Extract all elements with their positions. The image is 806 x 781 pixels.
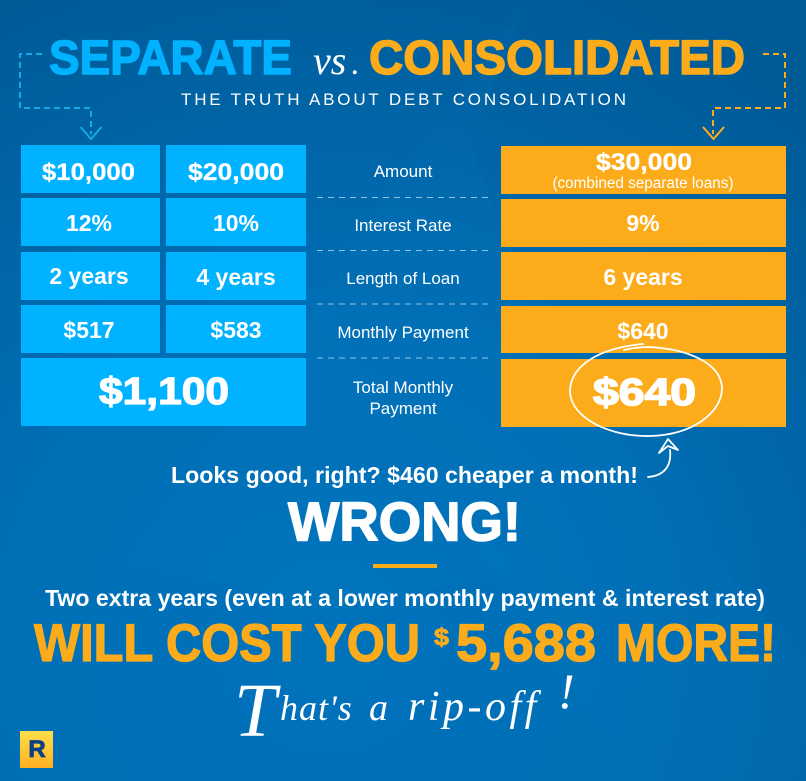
row: total monthly payment: $1,100 [99,371,229,413]
label: total monthly payment: Payment [369,399,437,418]
heading: consolidated: CONSOLIDATED [369,32,745,85]
row: monthly payment [21,305,306,353]
row: amount: (combined separate loans) [552,175,734,192]
icon: logo [20,731,53,768]
label: length of loan: Length of Loan [346,269,460,288]
row: total monthly payment: $640 [593,372,696,414]
callout: will cost you [34,614,776,673]
row: monthly payment: $583 [210,317,262,343]
row: interest rate [501,199,786,247]
script: that's a rip-off: ! [558,663,575,719]
row: interest rate: 10% [213,210,259,236]
arrow: separate [20,54,102,139]
row: monthly payment: $517 [63,317,115,343]
callout: will cost you: 5,688 [456,614,596,673]
arrow: consolidated [703,54,785,139]
row: interest rate [21,198,306,246]
callout: will cost you: $ [434,624,450,651]
panel: row labels [337,162,469,418]
callout: will cost you: WILL COST YOU [34,614,420,673]
row: total monthly payment [501,359,786,427]
heading: vs: vs. [313,38,360,83]
heading: wrong: WRONG! [288,490,521,552]
label: monthly payment: Monthly Payment [337,323,469,342]
script: that's a rip-off: hat's [280,688,353,728]
panel: consolidated loan [501,146,786,427]
row: amount: $20,000 [188,159,284,186]
row: amount [501,146,786,194]
row: length of loan [501,252,786,300]
row: amount [21,145,306,193]
row: amount: $10,000 [42,159,135,186]
label: total monthly payment: Total Monthly [353,378,453,397]
script: that's a rip-off: T [234,669,281,753]
heading: separate: SEPARATE [49,32,292,85]
row: length of loan: 6 years [603,264,683,290]
circle annotation [570,344,722,436]
script: that's a rip-off: a [369,687,388,729]
row: length of loan [21,252,306,300]
label: interest rate: Interest Rate [354,216,452,235]
row: interest rate: 12% [66,210,112,236]
text: two extra years: Two extra years (even at a lower monthly payment & interest rate) [45,585,765,611]
row: length of loan: 2 years [49,263,129,289]
text: looks good: Looks good, right? $460 cheaper a month! [171,462,638,488]
subtitle: THE TRUTH ABOUT DEBT CONSOLIDATION [181,90,626,109]
callout: will cost you: MORE! [616,614,776,673]
row: monthly payment: $640 [617,318,669,344]
row: interest rate: 9% [626,210,660,236]
title [49,32,745,85]
row: amount: $30,000 [596,149,692,176]
panel: separate loans [21,145,306,426]
row: monthly payment [501,306,786,353]
icon: logo: R [28,736,46,763]
row: total monthly payment [21,358,306,426]
label: amount: Amount [374,162,433,181]
script: that's a rip-off: rip-off [408,684,542,730]
arrow: to circle [648,439,678,477]
row: length of loan: 4 years [196,264,276,290]
